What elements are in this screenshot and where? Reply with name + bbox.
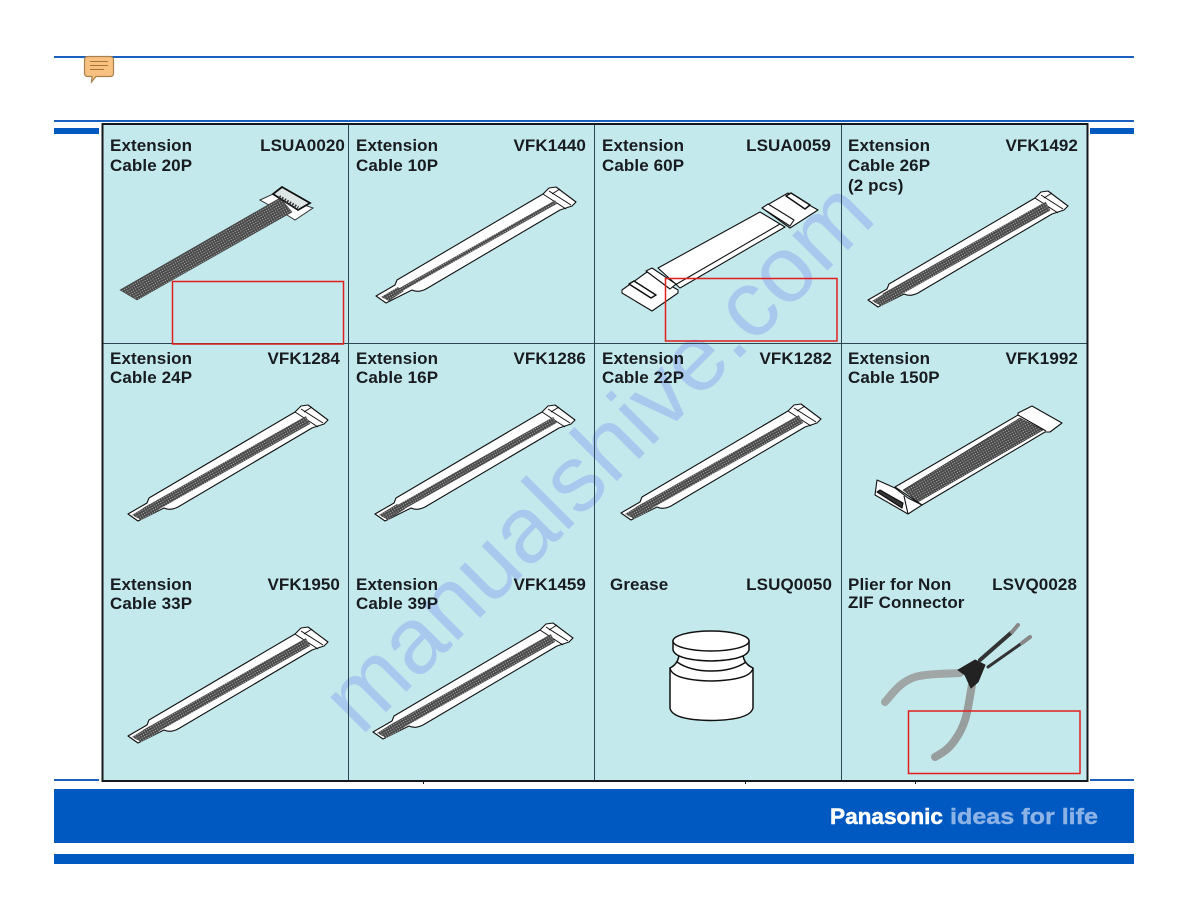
icon: plier bbox=[885, 625, 1030, 757]
cell: VFK1459 bbox=[356, 575, 586, 739]
cell: VFK1950: VFK1950 bbox=[267, 575, 340, 594]
cell: VFK1459: Cable 39P bbox=[356, 594, 438, 613]
cell: VFK1950: Extension bbox=[110, 575, 192, 594]
cell: LSUA0059: Cable 60P bbox=[602, 156, 684, 175]
cell: VFK1992: Extension bbox=[848, 349, 930, 368]
cell: VFK1284 bbox=[110, 349, 340, 521]
cell: VFK1950: Cable 33P bbox=[110, 594, 192, 613]
cell: VFK1284: Cable 24P bbox=[110, 368, 192, 387]
cell: VFK1284: VFK1284 bbox=[267, 349, 340, 368]
icon: speech note bbox=[84, 56, 114, 82]
cell: VFK1492: (2 pcs) bbox=[848, 176, 904, 195]
callout box: plier bbox=[908, 711, 1080, 774]
header lower rule bbox=[54, 120, 1134, 122]
panel: parts table background bbox=[103, 124, 1087, 781]
cell: LSUA0059 bbox=[602, 136, 831, 311]
cell: VFK1286 bbox=[356, 349, 586, 521]
footer rule right bbox=[1090, 779, 1134, 781]
cell: LSUA0059: Extension bbox=[602, 136, 684, 155]
cell: VFK1440: Cable 10P bbox=[356, 156, 438, 175]
cell: LSUQ0050 bbox=[610, 575, 832, 720]
right accent bar bbox=[1090, 128, 1134, 134]
footer band bbox=[54, 789, 1134, 843]
icon: cable 10P bbox=[376, 187, 576, 303]
cell: VFK1492 bbox=[848, 136, 1078, 307]
cell: LSUA0020: LSUA0020 bbox=[260, 136, 345, 155]
cell: LSUA0020 bbox=[110, 136, 345, 300]
left accent bar bbox=[54, 128, 99, 134]
cell: LSVQ0028 bbox=[848, 575, 1077, 757]
cell: VFK1492: Extension bbox=[848, 136, 930, 155]
cell: VFK1282 bbox=[602, 349, 832, 520]
icon: cable 20P bbox=[120, 187, 313, 300]
callout box: cell 1 bbox=[172, 282, 344, 344]
cell: VFK1992 bbox=[848, 349, 1078, 514]
cell: VFK1492: Cable 26P bbox=[848, 156, 930, 175]
icon: cable 33P bbox=[128, 627, 328, 743]
cell: VFK1284: Extension bbox=[110, 349, 192, 368]
footer rule left bbox=[54, 779, 99, 781]
header top rule bbox=[54, 56, 1134, 58]
cell: LSVQ0028: Plier for Non bbox=[848, 575, 951, 594]
cell: LSVQ0028: ZIF Connector bbox=[848, 593, 965, 612]
cell: VFK1286: VFK1286 bbox=[513, 349, 586, 368]
cell: LSUQ0050: LSUQ0050 bbox=[746, 575, 832, 594]
cell: LSUA0020: Cable 20P bbox=[110, 156, 192, 175]
cell: VFK1459: Extension bbox=[356, 575, 438, 594]
icon: cable 16P bbox=[375, 405, 575, 521]
cell: VFK1440 bbox=[356, 136, 586, 303]
icon: cable 150P bbox=[875, 406, 1062, 514]
cell: VFK1492: VFK1492 bbox=[1005, 136, 1078, 155]
icon: cable 60P bbox=[622, 193, 818, 311]
cell: VFK1950 bbox=[110, 575, 340, 743]
cell: VFK1286: Cable 16P bbox=[356, 368, 438, 387]
table grid lines bbox=[102, 124, 1088, 784]
cell: LSUA0059: LSUA0059 bbox=[746, 136, 831, 155]
cell: LSVQ0028: LSVQ0028 bbox=[992, 575, 1077, 594]
icon: cable 26P bbox=[868, 191, 1068, 307]
cell: VFK1440: Extension bbox=[356, 136, 438, 155]
cell: LSUQ0050: Grease bbox=[610, 575, 668, 594]
cell: VFK1992: Cable 150P bbox=[848, 368, 940, 387]
cell: VFK1440: VFK1440 bbox=[513, 136, 586, 155]
cell: VFK1282: VFK1282 bbox=[759, 349, 832, 368]
tagline: ideas for life bbox=[950, 804, 1098, 829]
cell: VFK1282: Cable 22P bbox=[602, 368, 684, 387]
callout box: cell 3 bbox=[666, 278, 837, 341]
icon: cable 39P bbox=[373, 623, 573, 739]
logo: Panasonic: Panasonic bbox=[830, 804, 943, 829]
watermark: manualshive.com bbox=[301, 160, 892, 751]
icon: cable 24P bbox=[128, 405, 328, 521]
cell: VFK1992: VFK1992 bbox=[1005, 349, 1078, 368]
cell: VFK1282: Extension bbox=[602, 349, 684, 368]
icon: cable 22P bbox=[621, 404, 821, 520]
icon: grease jar bbox=[670, 631, 753, 720]
cell: VFK1286: Extension bbox=[356, 349, 438, 368]
cell: VFK1459: VFK1459 bbox=[513, 575, 586, 594]
footer bottom bar bbox=[54, 854, 1134, 864]
cell: LSUA0020: Extension bbox=[110, 136, 192, 155]
